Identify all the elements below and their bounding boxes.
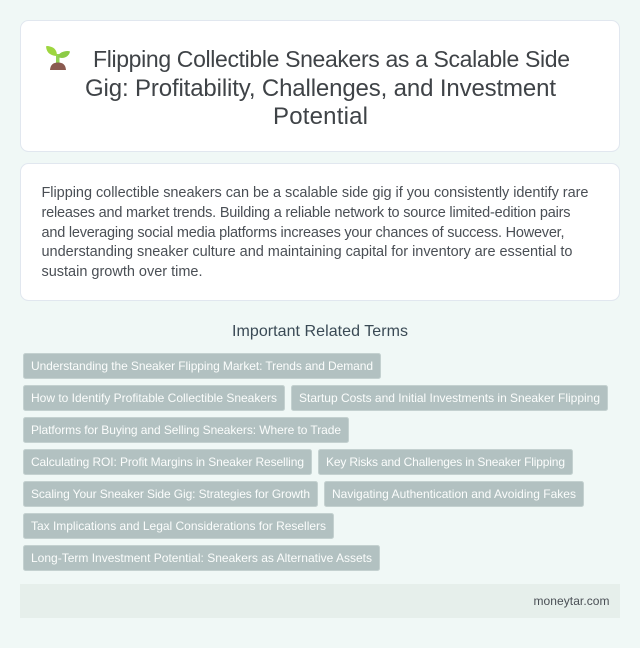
tag: key risks [318, 450, 572, 474]
tag: tax implications [24, 514, 334, 538]
tag: platforms [24, 418, 348, 442]
tag: identify profitable sneakers [24, 386, 284, 410]
title: Potential [273, 103, 368, 130]
summary text: releases and market trends. Building a reliable network to source limited-edition pairs [42, 205, 570, 221]
tag: authentication [324, 482, 584, 506]
tag: understanding the market [24, 354, 380, 378]
title: Flipping Collectible Sneakers as a Scalable Side [93, 46, 570, 72]
title: Gig: Profitability, Challenges, and Investment [85, 75, 556, 102]
summary text [42, 185, 588, 280]
tag: startup costs [292, 386, 608, 410]
footer source text: moneytar.com [534, 594, 610, 608]
summary text: sustain growth over time. [42, 264, 202, 280]
panel: summary card [20, 164, 620, 300]
tag: calculating ROI [24, 450, 312, 474]
tag: startup costs: Startup Costs and Initial Investments in Sneaker Flipping [299, 391, 600, 405]
tag: long-term investment [24, 546, 380, 570]
tag: platforms: Platforms for Buying and Selling Sneakers: Where to Trade [31, 423, 341, 437]
tag: authentication: Navigating Authentication and Avoiding Fakes [332, 487, 576, 501]
tag: identify profitable sneakers: How to Identify Profitable Collectible Sneakers [31, 391, 277, 405]
summary text: understanding sneaker culture and maintaining capital for inventory are essential to [42, 244, 572, 260]
footer [20, 584, 620, 618]
tag: long-term investment: Long-Term Investment Potential: Sneakers as Alternative Assets [31, 551, 372, 565]
icon: sprout [46, 46, 70, 70]
tag: scaling [24, 482, 318, 506]
panel: title card [20, 20, 620, 152]
summary text: and leveraging social media platforms increases your chances of success. However, [42, 225, 564, 241]
tag: key risks: Key Risks and Challenges in Sneaker Flipping [326, 455, 565, 469]
summary text: Flipping collectible sneakers can be a scalable side gig if you consistently identify rare [42, 185, 588, 201]
heading: important related terms: Important Related Terms [232, 323, 408, 340]
title [85, 46, 570, 130]
tag: understanding the market: Understanding the Sneaker Flipping Market: Trends and Demand [31, 359, 373, 373]
tag: tax implications: Tax Implications and Legal Considerations for Resellers [31, 519, 326, 533]
tag: scaling: Scaling Your Sneaker Side Gig: Strategies for Growth [31, 487, 310, 501]
tag: calculating ROI: Calculating ROI: Profit Margins in Sneaker Reselling [31, 455, 304, 469]
